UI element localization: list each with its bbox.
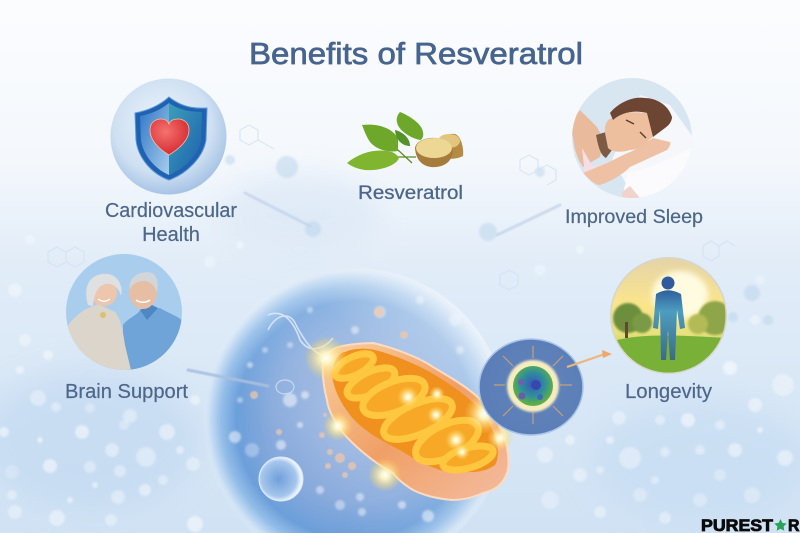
label: cardiovascular health: Cardiovascular [105, 200, 237, 222]
icon: person in sunlit meadow [610, 257, 732, 374]
panel: cardiovascular health [105, 78, 237, 246]
neuron cell outline [276, 380, 294, 394]
label: cardiovascular health: Health [142, 224, 200, 246]
logo: PureStar [701, 517, 800, 533]
background haze and bokeh [0, 125, 800, 532]
chart: cell sphere with mitochondrion [188, 268, 513, 533]
panel: brain support [64, 254, 188, 403]
icon: older couple photo [64, 254, 184, 370]
icon: shield and heart [110, 78, 226, 194]
icon: leaves and root slices [347, 112, 463, 170]
arrow: cardiovascular to centre [245, 193, 310, 226]
icon: nanoparticle cell in circle [479, 339, 583, 435]
label: longevity: Longevity [625, 381, 712, 403]
glowing energy points [304, 336, 513, 492]
icon: dna helix [268, 313, 333, 355]
panel: longevity [610, 257, 732, 403]
arrow: brain support to centre [188, 370, 268, 386]
title: Benefits of Resveratrol [249, 36, 583, 71]
large cell sphere [203, 268, 507, 533]
label: resveratrol: Resveratrol [358, 183, 463, 204]
icon: sleeping woman photo [572, 78, 693, 198]
panel: resveratrol [347, 112, 463, 204]
icon: small bubble [259, 457, 303, 501]
label: improved sleep: Improved Sleep [565, 207, 703, 228]
label: brain support: Brain Support [65, 381, 188, 403]
mitochondrion [323, 343, 508, 500]
panel: improved sleep [565, 78, 703, 228]
arrow: cell to longevity [567, 350, 612, 367]
arrow: improved sleep to centre [497, 205, 560, 235]
